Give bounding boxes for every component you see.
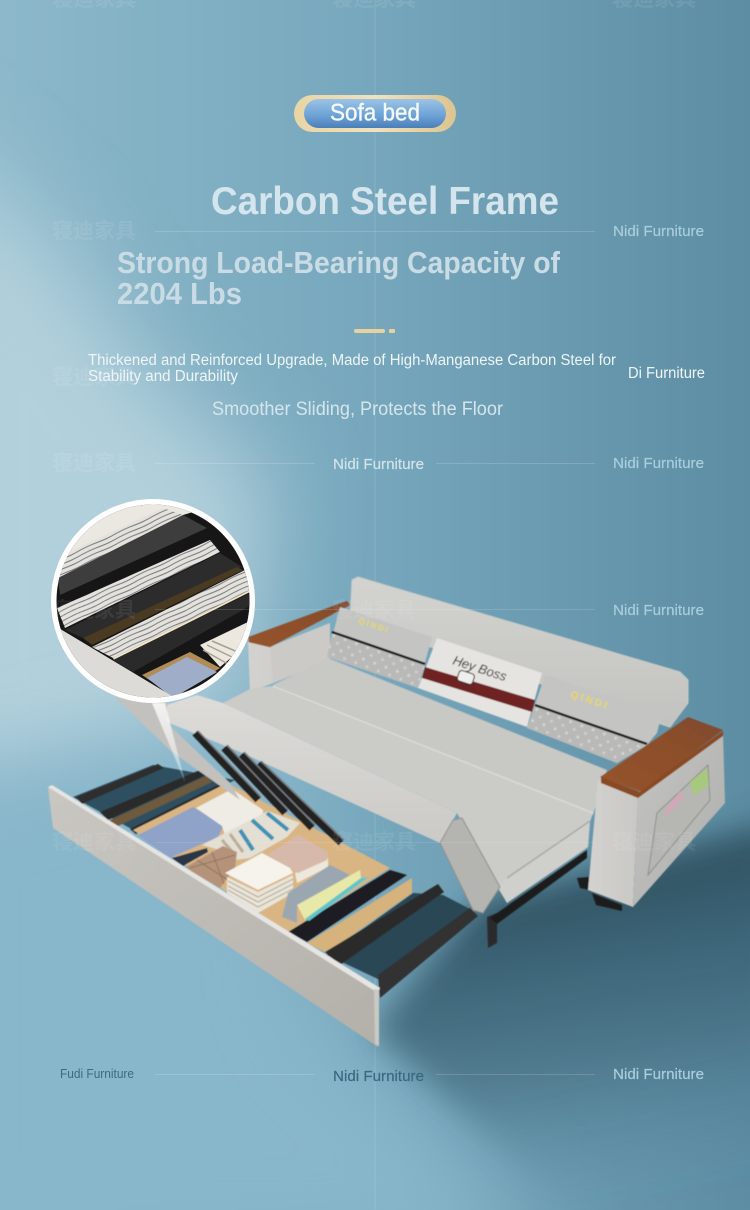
watermark labels: Nidi Furniture [333,1068,424,1085]
right arm [577,717,725,911]
tagline: Smoother Sliding, Protects the Floor [212,399,504,420]
pillows: QINDI [357,616,391,635]
detail circle [51,499,255,703]
badge: Sofa bed [294,95,456,132]
folded mattress band [115,695,457,843]
watermark labels: Nidi Furniture [613,223,704,240]
watermarks over sofa [52,598,696,854]
pillows: QINDI [569,689,611,712]
subtitle: 2204 Lbs [117,276,242,311]
subtitle: Strong Load-Bearing Capacity of [117,245,561,280]
watermark labels: Nidi Furniture [613,1066,704,1083]
description: Thickened and Reinforced Upgrade, Made of High-Manganese Carbon Steel for [88,352,616,369]
watermark grid: 寝迪家具 [52,451,136,475]
stored clothes [138,789,369,923]
side pocket [648,765,710,875]
description: Stability and Durability [88,368,238,385]
watermark grid: 寝迪家具 [52,219,136,243]
watermarks over sofa: 寝迪家具 [52,598,136,622]
rear seat [273,658,607,815]
label: Fudi Furniture: Fudi Furniture [60,1067,134,1081]
mattress end panel [440,818,500,913]
left arm and backrest [248,577,688,727]
watermark labels: Nidi Furniture [613,602,704,619]
watermarks over sofa: 寝迪家具 [332,598,416,622]
watermarks over sofa: 寝迪家具 [612,830,696,854]
description [88,352,616,385]
lift frame slats [195,731,344,843]
label: Di Furniture: Di Furniture [628,365,705,382]
drawer and frame [73,764,497,998]
subtitle [117,245,561,311]
pillows [327,607,662,763]
title: Carbon Steel Frame [211,180,559,223]
watermark grid: 寝迪家具 [52,365,136,389]
watermark labels [333,223,704,1085]
watermarks over sofa: 寝迪家具 [332,830,416,854]
pillows: Hey Boss [451,653,509,684]
mid seat section [490,850,587,924]
watermarks over sofa: 寝迪家具 [52,830,136,854]
watermark grid [52,0,696,1074]
gold divider [354,329,395,333]
sofa bed illustration [48,577,725,1047]
zoom pointer [152,703,185,782]
watermark labels: Nidi Furniture [333,456,424,473]
watermark labels: Nidi Furniture [613,455,704,472]
drawer front panel [48,785,380,1047]
badge: Sofa bed: Sofa bed [330,100,420,126]
